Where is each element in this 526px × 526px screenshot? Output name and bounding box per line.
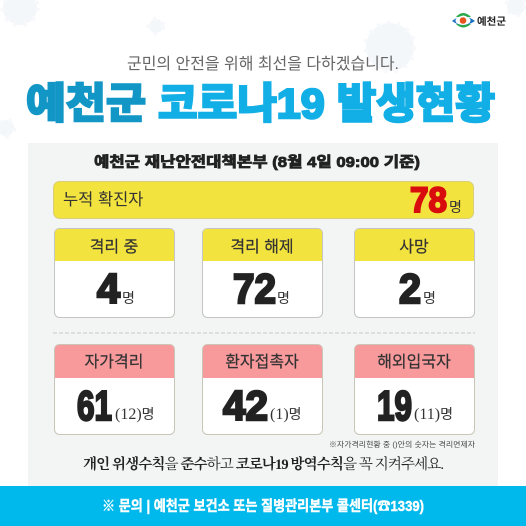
card: contacts	[202, 344, 322, 434]
card value: 2	[399, 265, 421, 312]
card label: 격리 해제	[230, 238, 294, 256]
logo wordmark: 예천군	[477, 15, 506, 28]
bar label: 누적 확진자	[63, 190, 143, 209]
card sub-value and unit: (11)명	[414, 406, 453, 423]
card value: 72	[233, 265, 276, 312]
card: in isolation	[54, 228, 174, 318]
card value: 19	[377, 382, 412, 429]
footer contact text: ※ 문의 | 예천군 보건소 또는 질병관리본부 콜센터(☎1339)	[102, 498, 424, 515]
panel heading: 예천군 재난안전대책본부 (8월 4일 09:00 기준)	[94, 154, 420, 171]
main title	[26, 80, 495, 127]
logo: Yecheon-gun	[452, 13, 506, 28]
card unit: 명	[277, 290, 290, 306]
footer band	[0, 486, 526, 526]
card: released	[202, 228, 322, 318]
card: self-quarantine	[54, 344, 174, 434]
card sub-value and unit: (12)명	[115, 406, 155, 423]
card label: 해외입국자	[377, 353, 451, 371]
card sub-value and unit: (1)명	[270, 406, 302, 423]
card: overseas arrivals	[354, 344, 474, 434]
card unit: 명	[122, 290, 135, 306]
card value: 42	[223, 382, 268, 429]
bar unit: 명	[449, 199, 462, 215]
card label: 자가격리	[85, 353, 143, 371]
card value: 61	[77, 382, 112, 429]
card label: 격리 중	[90, 238, 138, 256]
footnote: ※자가격리현황 중 ()안의 숫자는 격리면제자	[329, 439, 475, 449]
background virus decorations	[0, 0, 525, 136]
hygiene notice: 개인 위생수칙을 준수하고 코로나19 방역수칙을 꼭 지켜주세요.	[83, 455, 444, 473]
card label: 환자접촉자	[225, 353, 299, 371]
bar value: 78	[410, 181, 447, 220]
icon: county emblem	[452, 13, 475, 28]
title: remainder: 코로나19 발생현황	[158, 80, 495, 127]
cumulative confirmed bar	[54, 181, 474, 220]
card value: 4	[97, 265, 121, 312]
subtitle handwriting line: 군민의 안전을 위해 최선을 다하겠습니다.	[127, 55, 399, 73]
title: county name: 예천군	[26, 80, 146, 127]
panel: status board	[28, 143, 498, 486]
card unit: 명	[423, 290, 436, 306]
card: deaths	[354, 228, 474, 318]
card label: 사망	[399, 238, 429, 256]
